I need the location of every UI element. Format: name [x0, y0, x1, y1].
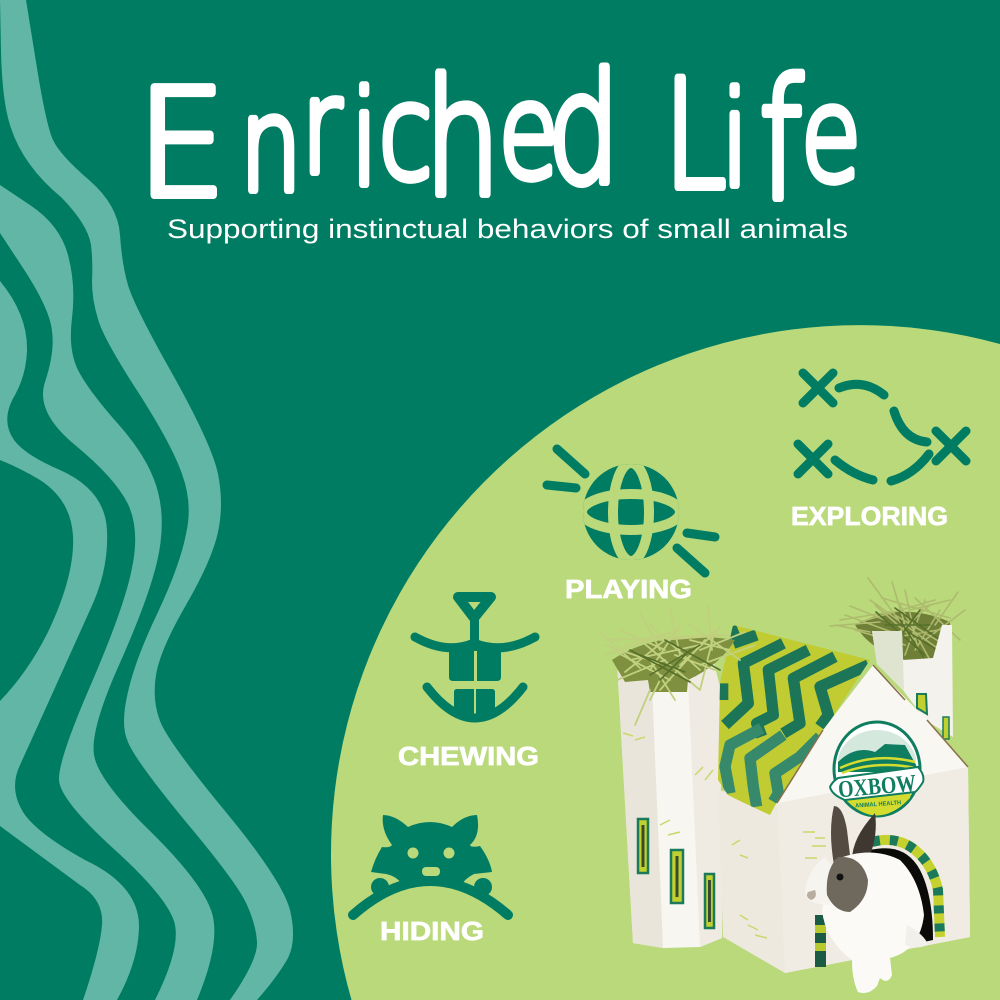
subtitle: Supporting instinctual behaviors of small animals — [167, 214, 848, 244]
title: L — [664, 49, 726, 223]
logo: oxbow: ANIMAL HEALTH — [855, 800, 901, 810]
title: h — [424, 47, 501, 232]
title: e — [499, 57, 559, 209]
door left post — [815, 915, 826, 967]
title: n — [240, 70, 302, 222]
brick doodles — [623, 733, 826, 938]
icon: rabbit — [805, 806, 928, 993]
title: i — [351, 64, 378, 216]
roof with chevron shingles — [718, 625, 870, 815]
title: e — [801, 60, 861, 212]
label: chewing: CHEWING — [398, 741, 539, 771]
logo: oxbow: OXBOW — [837, 771, 917, 803]
title: c — [379, 58, 432, 210]
hay: left tower — [600, 606, 755, 725]
main side wall — [718, 790, 785, 973]
title: E — [137, 58, 226, 230]
title: d — [548, 41, 620, 218]
panel: light green circle — [331, 325, 1000, 1000]
door arch — [870, 848, 933, 946]
wave bands — [0, 0, 293, 1000]
title: i — [722, 65, 749, 217]
label: exploring: EXPLORING — [791, 501, 948, 531]
illustration: cardboard castle with rabbit — [600, 578, 970, 993]
front wall — [777, 665, 970, 973]
label: playing: PLAYING — [565, 574, 692, 604]
left tower — [617, 656, 722, 948]
title: r — [302, 52, 342, 204]
icon: chewing teeth — [415, 597, 535, 718]
icon: hiding animal — [353, 815, 508, 915]
right back tower — [872, 625, 953, 737]
icon: playing ball — [547, 449, 715, 573]
windows — [638, 819, 714, 928]
label: hiding: HIDING — [380, 916, 484, 946]
logo: oxbow — [830, 722, 923, 816]
hay: right tower — [830, 578, 965, 660]
icon: exploring map path — [798, 373, 966, 481]
title: f — [759, 46, 803, 238]
